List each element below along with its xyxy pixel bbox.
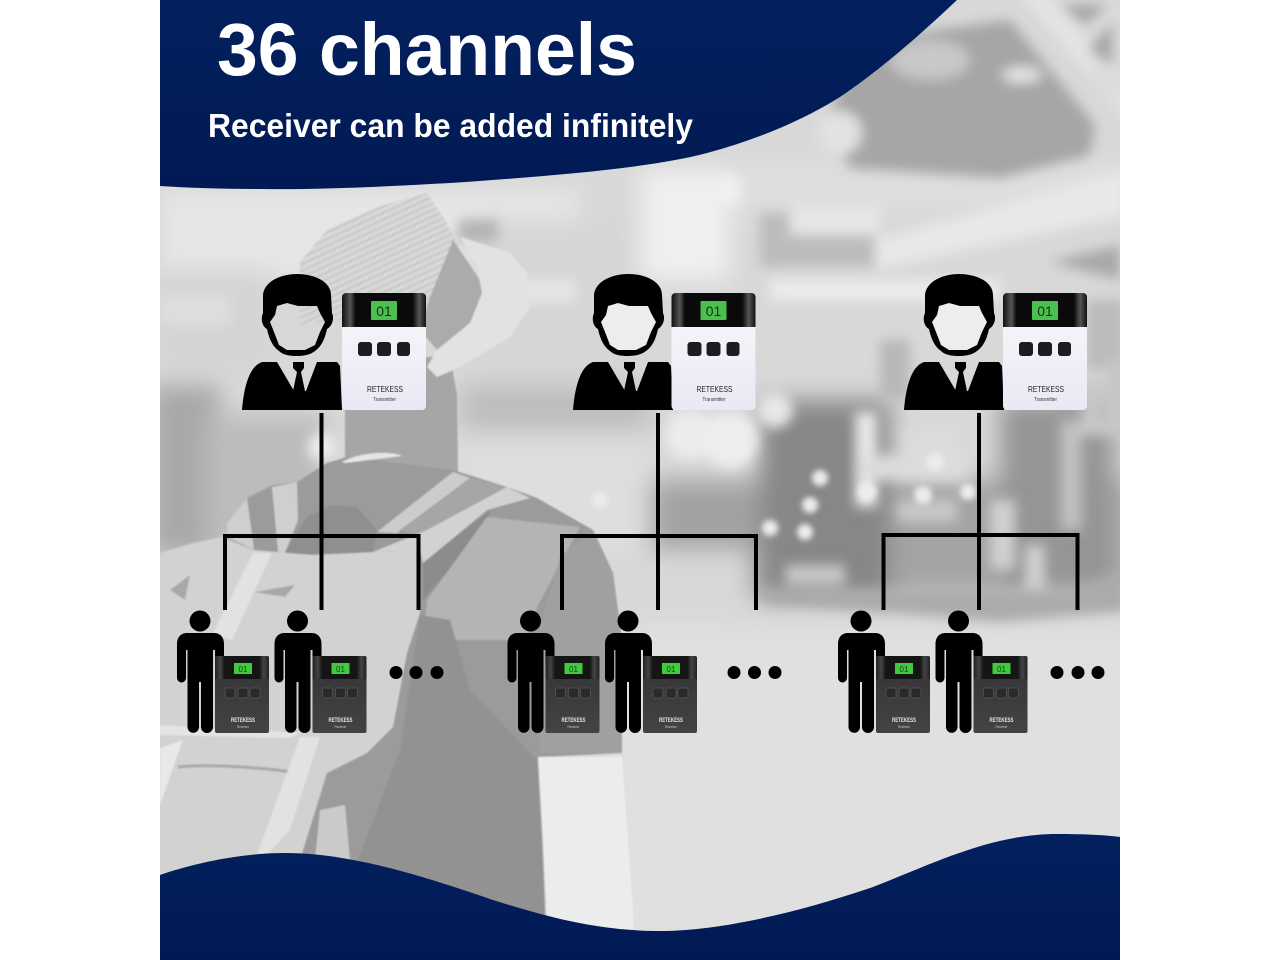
presenter 2	[573, 274, 673, 410]
wedge under strap	[423, 510, 490, 600]
transmitter 1: 01	[376, 303, 392, 319]
back shadow patch	[283, 505, 377, 555]
shirt back panel	[423, 517, 580, 640]
transmitter 3	[1003, 293, 1087, 410]
connector tree 3	[884, 413, 1078, 610]
listener with receiver A: RETEKESS	[231, 717, 255, 724]
transmitter 3: 01	[1037, 303, 1053, 319]
background photo: traveller with hat and backpack	[150, 0, 1140, 960]
connector tree 1	[225, 413, 418, 610]
hat band	[426, 240, 482, 350]
traveller figure	[160, 193, 634, 935]
shirt	[227, 457, 622, 935]
listener with receiver A	[508, 610, 600, 733]
bokeh lights	[592, 453, 976, 540]
hat crown	[300, 193, 458, 325]
listener with receiver A: Receiver	[237, 725, 250, 729]
arm	[538, 757, 634, 935]
listener group 2	[508, 610, 782, 733]
presenter 3	[904, 274, 1004, 410]
ellipsis dots	[1050, 666, 1104, 679]
transmitter 1: Transmitter	[373, 397, 396, 403]
hat brim	[427, 237, 530, 377]
transmitter 2: 01	[706, 303, 721, 319]
transmitter 2: Transmitter	[702, 397, 726, 403]
right strap, outer light band	[377, 472, 470, 533]
transmitter 2: RETEKESS	[696, 384, 733, 394]
blurred scene, large tones	[160, 166, 1120, 654]
shirt sleeve side	[557, 553, 566, 568]
listener with receiver A: Receiver	[568, 725, 580, 729]
listener with receiver B: 01	[336, 665, 345, 674]
listener with receiver A: RETEKESS	[562, 717, 586, 724]
subtitle: Receiver can be added infinitely	[208, 107, 694, 144]
collar	[342, 453, 402, 463]
listener with receiver A: 01	[569, 665, 578, 674]
right strap, dark band	[401, 479, 504, 534]
ellipsis dots	[728, 666, 782, 679]
listener with receiver A	[838, 610, 930, 733]
lower pocket	[315, 805, 350, 860]
ellipsis dots	[390, 666, 444, 679]
listener with receiver B: 01	[667, 665, 676, 674]
transmitter 3: Transmitter	[1034, 397, 1057, 403]
lower strap	[255, 737, 320, 860]
transmitter 1: RETEKESS	[367, 384, 403, 394]
shirt lower centre shadow	[350, 615, 545, 925]
right strap, inner light band	[373, 487, 530, 563]
listener with receiver A: 01	[900, 665, 909, 674]
neck	[345, 355, 458, 472]
listener with receiver B: RETEKESS	[990, 717, 1014, 724]
presenter 1	[242, 274, 342, 410]
listener with receiver A: RETEKESS	[892, 717, 916, 724]
listener with receiver A: Receiver	[898, 725, 911, 729]
listener group 1	[177, 610, 444, 733]
title: 36 channels	[217, 8, 637, 91]
connector tree 2	[562, 413, 756, 610]
listener with receiver A	[177, 610, 269, 733]
header banner	[160, 0, 957, 189]
listener with receiver B	[605, 610, 697, 733]
listener with receiver B: RETEKESS	[328, 717, 353, 724]
listener with receiver B: RETEKESS	[659, 717, 683, 724]
listener with receiver A: 01	[239, 665, 248, 674]
listener with receiver B	[274, 610, 366, 733]
pack folds	[170, 575, 295, 600]
flap crease	[178, 766, 300, 773]
transmitter 2	[672, 293, 756, 410]
transmitter 3: RETEKESS	[1028, 384, 1064, 394]
listener with receiver B: 01	[997, 665, 1006, 674]
left shoulder strap bands	[227, 498, 254, 550]
listener group 3	[838, 610, 1104, 733]
backpack	[160, 537, 420, 885]
listener with receiver B	[936, 610, 1028, 733]
transmitter 1	[342, 293, 426, 410]
listener with receiver B: Receiver	[996, 725, 1008, 729]
listener with receiver B: Receiver	[665, 725, 678, 729]
listener with receiver B: Receiver	[334, 725, 347, 729]
footer banner	[160, 834, 1120, 960]
